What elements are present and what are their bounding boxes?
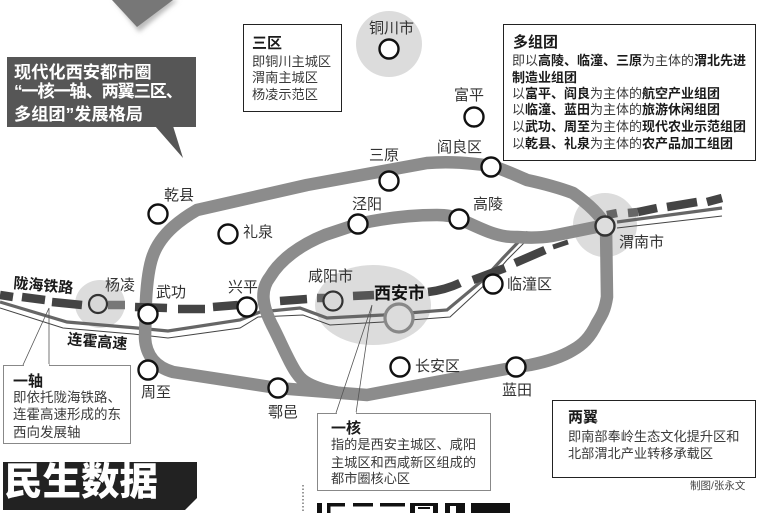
panel: one axis: 西向发展轴 bbox=[13, 425, 80, 440]
city labels: 礼泉 bbox=[243, 224, 273, 241]
panel: one core: 主城区和西咸新区组成的 bbox=[331, 455, 476, 470]
city labels: 周至 bbox=[141, 384, 171, 401]
city area: Yangling bbox=[75, 280, 125, 328]
panel: one core: 一核 bbox=[331, 419, 361, 437]
city labels: 铜川市 bbox=[369, 20, 414, 37]
title banner bbox=[7, 57, 196, 158]
city labels: 咸阳市 bbox=[308, 268, 353, 285]
title text bbox=[14, 62, 183, 124]
decorative triangle at top bbox=[112, 0, 178, 32]
panel: two wings: 即南部奉岭生态文化提升区和 bbox=[568, 429, 739, 444]
city labels: 兴平 bbox=[228, 279, 258, 296]
panel: multiple clusters: 多组团 bbox=[513, 33, 558, 51]
city labels: 乾县 bbox=[164, 187, 194, 204]
panel: one core bbox=[318, 412, 490, 490]
city area: Tongchuan bbox=[356, 11, 422, 77]
heading block: livelihood data: 民生数据 bbox=[4, 461, 158, 504]
city labels: 三原 bbox=[369, 147, 399, 164]
city labels: 泾阳 bbox=[352, 196, 382, 213]
panel: two wings: 两翼 bbox=[568, 409, 598, 426]
city labels: 蓝田 bbox=[502, 382, 532, 399]
city area: Xi'an and Xianyang core bbox=[315, 265, 431, 345]
label: Lianhuo expressway: 连霍高速 bbox=[67, 330, 128, 353]
callout pointer: one axis bbox=[23, 308, 49, 365]
city labels: 武功 bbox=[156, 284, 186, 301]
city area: Weinan bbox=[573, 193, 637, 257]
panel: two wings: 北部渭北产业转移承载区 bbox=[568, 446, 713, 461]
panel: one core: 指的是西安主城区、咸阳 bbox=[331, 437, 476, 452]
credit: 制图/张永文 bbox=[690, 479, 746, 492]
panel: one axis: 连霍高速形成的东 bbox=[13, 406, 121, 422]
panel: multiple clusters: 制造业组团 bbox=[512, 70, 577, 85]
panel: one core: 都市圈核心区 bbox=[331, 470, 410, 486]
panel: multiple clusters: 以富平、阎良为主体的航空产业组团 bbox=[512, 86, 720, 101]
inner ring road bbox=[263, 215, 606, 393]
city labels bbox=[105, 20, 664, 421]
panel: one axis: 一轴 bbox=[13, 373, 43, 390]
one axis: Longhai railway dashes bbox=[0, 198, 722, 309]
city nodes bbox=[89, 40, 614, 398]
panel: three districts: 三区 bbox=[252, 35, 282, 52]
callout pointer: one core bbox=[336, 305, 372, 413]
clipped heading fragment at bottom edge bbox=[317, 503, 510, 513]
title text: 多组团”发展格局 bbox=[14, 104, 143, 124]
panel: multiple clusters: 以临潼、蓝田为主体的旅游休闲组团 bbox=[512, 102, 720, 117]
city labels: 杨凌 bbox=[105, 277, 135, 294]
city labels: 阎良区 bbox=[437, 139, 482, 156]
city labels: 长安区 bbox=[415, 358, 460, 375]
heading block: livelihood data bbox=[3, 461, 197, 510]
panel: three districts: 渭南主城区 bbox=[252, 70, 318, 85]
panel: multiple clusters bbox=[504, 24, 756, 160]
city labels: 鄠邑 bbox=[268, 404, 298, 421]
label: Longhai railway: 陇海铁路 bbox=[13, 274, 74, 297]
title text: “一核一轴、两翼三区、 bbox=[14, 81, 183, 101]
city labels: 临潼区 bbox=[507, 275, 552, 293]
two wings: outer ring road bbox=[145, 162, 607, 395]
city labels: 西安市 bbox=[374, 283, 425, 303]
panel: multiple clusters: 以武功、周至为主体的现代农业示范组团 bbox=[512, 119, 746, 134]
panel: one axis: 即依托陇海铁路、 bbox=[13, 390, 121, 405]
panel: multiple clusters: 即以高陵、临潼、三原为主体的渭北先进 bbox=[512, 53, 746, 68]
city labels: 高陵 bbox=[473, 196, 503, 213]
Lianhuo expressway lines bbox=[0, 208, 722, 338]
city labels: 渭南市 bbox=[619, 234, 664, 251]
divider bbox=[302, 485, 304, 513]
title text: 现代化西安都市圈 bbox=[14, 62, 152, 82]
panel: three districts: 杨凌示范区 bbox=[252, 87, 318, 102]
panel: two wings bbox=[552, 400, 756, 478]
panel: one axis bbox=[4, 364, 130, 444]
panel: multiple clusters: 以乾县、礼泉为主体的农产品加工组团 bbox=[512, 136, 733, 151]
panel: three districts: 即铜川主城区 bbox=[252, 54, 331, 69]
city labels: 富平 bbox=[454, 86, 484, 104]
panel: three districts bbox=[244, 24, 342, 112]
